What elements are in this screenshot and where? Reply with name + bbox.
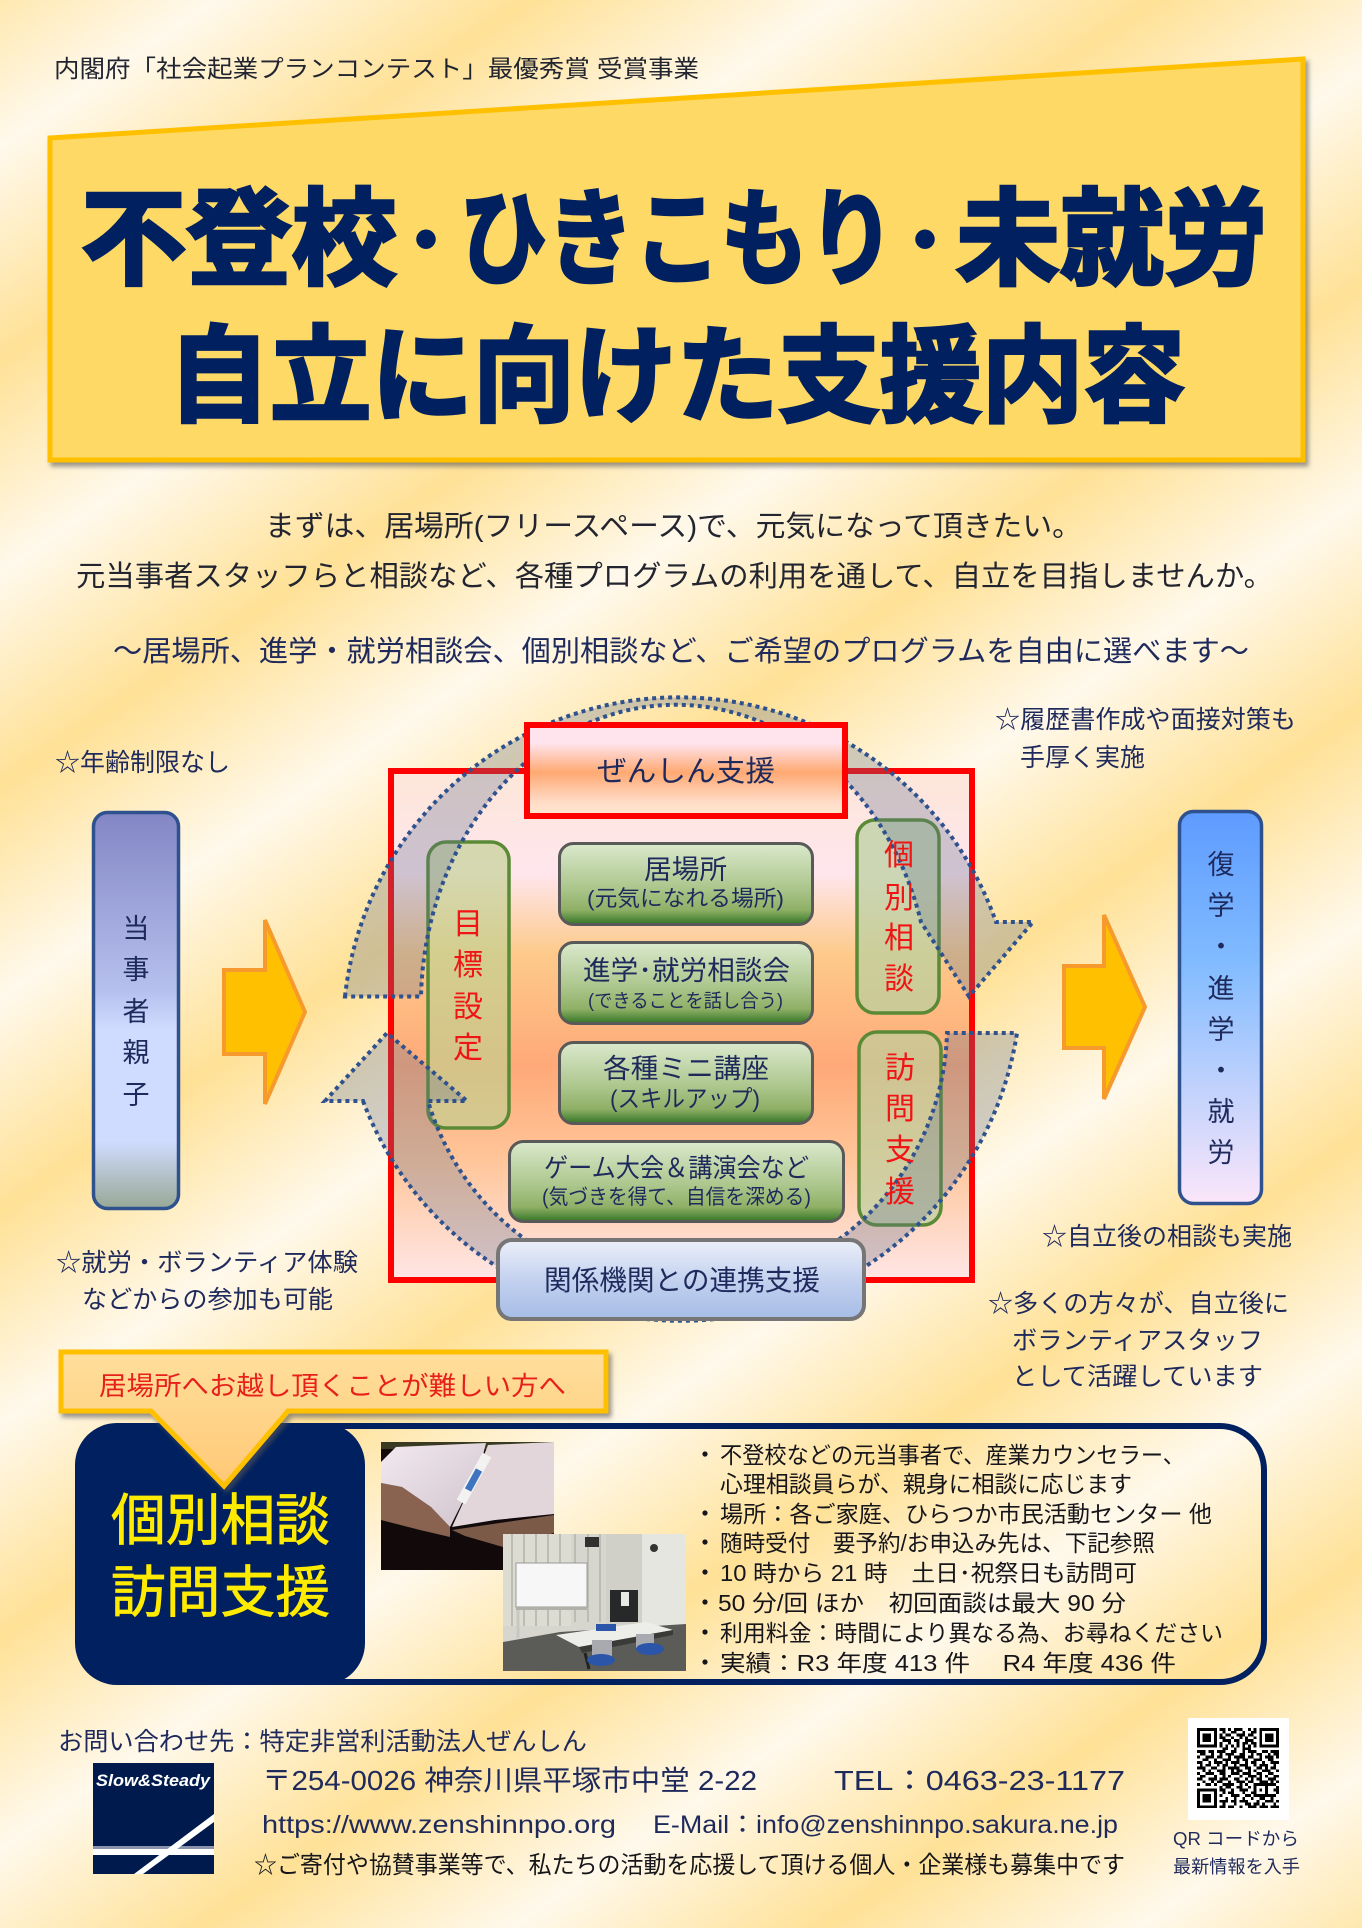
program: ゲーム大会 bbox=[510, 1142, 844, 1222]
arrow: left to centre bbox=[224, 920, 305, 1104]
note: resume: ☆履歴書作成や面接対策も bbox=[995, 706, 1296, 734]
consultation details list: 場所：各ご家庭、ひらつか市民活動センター 他 bbox=[720, 1501, 1212, 1527]
label: 目標設定: 定 bbox=[453, 1032, 483, 1065]
consultation details list: 心理相談員らが、親身に相談に応じます bbox=[720, 1471, 1132, 1497]
box: ぜんしん支援 bbox=[527, 725, 845, 816]
label: 訪問支援: 援 bbox=[885, 1176, 915, 1209]
program: 居場所 bbox=[560, 844, 812, 924]
outlined panel: consultation details bbox=[100, 1426, 1264, 1682]
address and telephone bbox=[262, 1765, 1125, 1796]
note: volunteers: として活躍しています bbox=[1012, 1363, 1263, 1391]
box: 目標設定 bbox=[428, 842, 509, 1128]
note: volunteers: ボランティアスタッフ bbox=[1012, 1327, 1263, 1355]
title banner bbox=[50, 59, 1303, 460]
program: ゲーム大会: ゲーム大会＆講演会など bbox=[544, 1153, 809, 1183]
QR caption: 最新情報を入手 bbox=[1173, 1857, 1300, 1877]
program: 進学・就労相談会: (できることを話し合う) bbox=[588, 990, 783, 1012]
program: 各種ミニ講座: 各種ミニ講座 bbox=[603, 1054, 769, 1084]
label: 個別相談 bbox=[884, 839, 914, 996]
label: 目標設定 bbox=[453, 908, 483, 1065]
right box: 復学・進学・就労 bbox=[1180, 812, 1262, 1204]
left box: 当事者親子: 者 bbox=[122, 997, 150, 1027]
label: 目標設定: 標 bbox=[453, 949, 483, 982]
navy block: 個別相談 訪問支援 bbox=[75, 1423, 365, 1685]
program: 居場所: 居場所 bbox=[644, 855, 727, 885]
QR code bbox=[1188, 1718, 1289, 1820]
cycle arrow: top bbox=[345, 697, 1033, 996]
consultation details list: 随時受付 要予約/お申込み先は、下記参照 bbox=[720, 1530, 1155, 1556]
note: work experience bbox=[56, 1249, 358, 1314]
box: 個別相談 bbox=[857, 820, 939, 1013]
right box: 復学・進学・就労: 労 bbox=[1208, 1138, 1234, 1168]
consultation details list: 10 時から 21 時 土日･祝祭日も訪問可 bbox=[720, 1560, 1137, 1586]
box: ぜんしん支援: ぜんしん支援 bbox=[597, 755, 775, 788]
box: 訪問支援 bbox=[859, 1032, 941, 1225]
label: 個別相談: 相 bbox=[884, 922, 914, 955]
award line: 内閣府「社会起業プランコンテスト」最優秀賞 受賞事業 bbox=[54, 56, 699, 83]
web and email: E-Mail：info@zenshinnpo.sakura.ne.jp bbox=[653, 1811, 1118, 1839]
intro text: 元当事者スタッフらと相談など、各種プログラムの利用を通して、自立を目指しませんか。 bbox=[76, 560, 1273, 593]
donation note: ☆ご寄付や協賛事業等で、私たちの活動を応援して頂ける個人・企業様も募集中です bbox=[254, 1852, 1125, 1879]
left box: 当事者親子 bbox=[94, 812, 178, 1208]
navy block: 個別相談 訪問支援: 個別相談 bbox=[111, 1489, 330, 1552]
box: 関係機関との連携支援: 関係機関との連携支援 bbox=[544, 1265, 820, 1296]
label: 目標設定: 設 bbox=[453, 991, 483, 1024]
label: 個別相談: 個 bbox=[884, 839, 914, 872]
label: 訪問支援 bbox=[885, 1052, 915, 1209]
callout: 居場所へお越し頂くことが難しい方へ bbox=[99, 1371, 566, 1401]
title line 1: 不登校 bbox=[81, 182, 397, 299]
consultation details list: 利用料金：時間により異なる為、お尋ねください bbox=[720, 1620, 1223, 1646]
right box: 復学・進学・就労: 進 bbox=[1208, 974, 1234, 1004]
note: after independence: ☆自立後の相談も実施 bbox=[1042, 1223, 1292, 1251]
intro text bbox=[76, 510, 1273, 593]
QR caption: QR コードから bbox=[1173, 1829, 1299, 1849]
arrow: centre to right bbox=[1064, 915, 1145, 1099]
label: 訪問支援: 問 bbox=[885, 1093, 915, 1126]
note: volunteers bbox=[988, 1290, 1289, 1391]
callout bbox=[61, 1352, 606, 1486]
consultation details list: 不登校などの元当事者で、産業カウンセラー、 bbox=[720, 1442, 1185, 1468]
right box: 復学・進学・就労: 就 bbox=[1208, 1097, 1234, 1127]
cycle arrow: bottom bbox=[325, 1033, 1017, 1321]
right box: 復学・進学・就労: ・ bbox=[1208, 1056, 1234, 1086]
intro text: まずは、居場所(フリースペース)で、元気になって頂きたい。 bbox=[265, 510, 1082, 543]
left box: 当事者親子: 当 bbox=[122, 914, 150, 944]
label: 訪問支援: 訪 bbox=[885, 1052, 915, 1085]
photo: meeting room bbox=[503, 1534, 686, 1671]
title line 1 bbox=[81, 182, 1268, 299]
label: 個別相談: 談 bbox=[884, 963, 914, 996]
logo: Slow&Steady: Slow&Steady bbox=[96, 1771, 212, 1790]
program subtitle: ～居場所、進学・就労相談会、個別相談など、ご希望のプログラムを自由に選べます～ bbox=[113, 635, 1249, 668]
left box: 当事者親子: 事 bbox=[122, 955, 150, 985]
program: 居場所: (元気になれる場所) bbox=[587, 886, 784, 911]
right box: 復学・進学・就労: 復 bbox=[1208, 850, 1234, 880]
QR caption bbox=[1173, 1829, 1300, 1877]
title line 1: ・ bbox=[887, 200, 963, 285]
box: 関係機関との連携支援 bbox=[498, 1240, 864, 1319]
title line 1: ひきこもり bbox=[460, 182, 895, 299]
navy block: 個別相談 訪問支援: 訪問支援 bbox=[111, 1561, 330, 1624]
right box: 復学・進学・就労: 学 bbox=[1208, 891, 1234, 921]
web and email bbox=[262, 1811, 1118, 1839]
left box: 当事者親子: 親 bbox=[122, 1038, 150, 1068]
title line 2: 自立に向けた支援内容 bbox=[168, 319, 1185, 436]
right box: 復学・進学・就労: ・ bbox=[1208, 932, 1234, 962]
note: volunteers: ☆多くの方々が、自立後に bbox=[988, 1290, 1289, 1318]
note: work experience: ☆就労・ボランティア体験 bbox=[56, 1249, 358, 1277]
left box: 当事者親子: 子 bbox=[122, 1080, 150, 1110]
label: 訪問支援: 支 bbox=[885, 1134, 915, 1167]
note: resume bbox=[995, 706, 1296, 772]
photo: open book bbox=[381, 1442, 554, 1570]
label: 目標設定: 目 bbox=[453, 908, 483, 941]
note: age: ☆年齢制限なし bbox=[55, 749, 230, 777]
program: 各種ミニ講座 bbox=[560, 1042, 812, 1124]
program: ゲーム大会: (気づきを得て、自信を深める) bbox=[542, 1186, 811, 1209]
right box: 復学・進学・就労: 学 bbox=[1208, 1015, 1234, 1045]
consultation details list: 実績：R3 年度 413 件 R4 年度 436 件 bbox=[720, 1650, 1176, 1676]
program: 各種ミニ講座: (スキルアップ) bbox=[610, 1086, 760, 1113]
address and telephone: TEL：0463-23-1177 bbox=[834, 1765, 1125, 1796]
note: work experience: などからの参加も可能 bbox=[82, 1286, 333, 1314]
title line 1: ・ bbox=[388, 200, 464, 285]
note: resume: 手厚く実施 bbox=[1020, 744, 1145, 772]
label: 個別相談: 別 bbox=[884, 882, 914, 915]
contact heading: お問い合わせ先：特定非営利活動法人ぜんしん bbox=[58, 1728, 587, 1756]
program: 進学・就労相談会 bbox=[560, 942, 812, 1024]
title line 1: 未就労 bbox=[956, 182, 1268, 299]
address and telephone: 〒254-0026 神奈川県平塚市中堂 2-22 bbox=[262, 1765, 757, 1796]
web and email: https://www.zenshinnpo.org bbox=[262, 1811, 616, 1839]
red square panel bbox=[391, 771, 972, 1280]
consultation details list: 50 分/回 ほか 初回面談は最大 90 分 bbox=[718, 1590, 1126, 1616]
consultation details list bbox=[702, 1442, 1223, 1676]
program: 進学・就労相談会: 進学･就労相談会 bbox=[583, 956, 790, 986]
logo: Slow&Steady bbox=[93, 1763, 216, 1875]
